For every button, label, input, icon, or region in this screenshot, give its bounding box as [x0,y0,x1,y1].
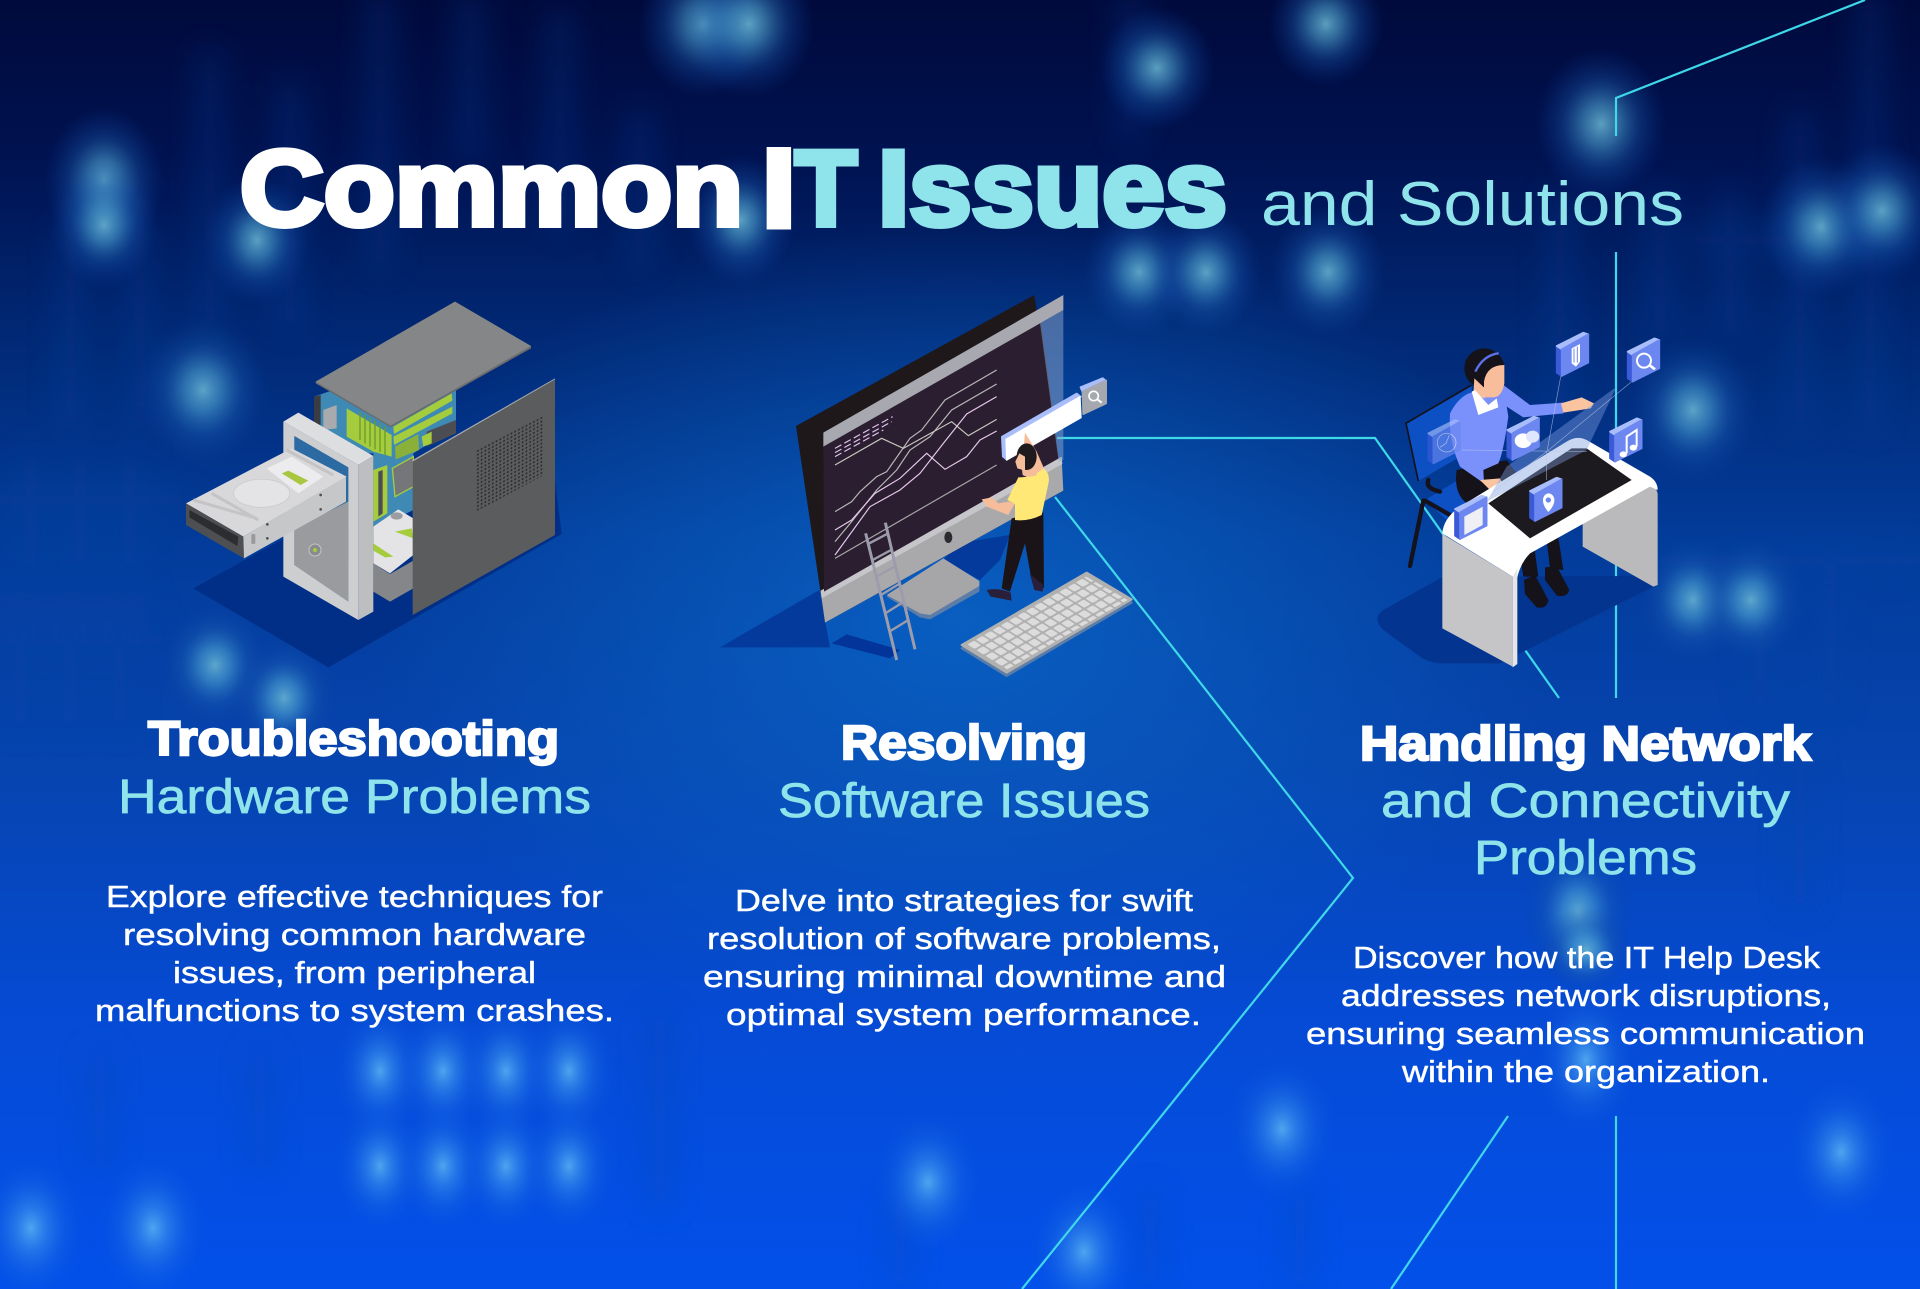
illustration: monitor with person and keyboard [720,295,1132,676]
text block: network: within the organization. [1401,1054,1770,1089]
illustration: opened computer tower [186,302,562,667]
icon: pencil [1557,333,1588,376]
text block: software: ensuring minimal downtime and [703,959,1226,994]
icon: map pin [1530,478,1562,521]
text block: software: Delve into strategies for swift [735,883,1193,918]
panel: software [703,717,1226,1032]
text block: hardware: Explore effective techniques for [106,879,603,914]
panel: network [1306,718,1865,1089]
connector lines [1022,0,1865,1289]
heading: network: and Connectivity [1381,775,1790,828]
text block: software: optimal system performance. [726,997,1201,1032]
monitor body [796,295,1063,623]
title: I [764,128,794,248]
heading: software: Resolving [841,717,1087,770]
heading: hardware [118,713,591,824]
woman [1450,348,1594,608]
heading: network [1360,718,1811,885]
desk shadow [1377,576,1653,663]
side panel [413,378,555,615]
front bezel [283,413,373,620]
text block: hardware: malfunctions to system crashes. [95,993,614,1028]
icon: notes [1455,496,1487,539]
panel: hardware [95,713,614,1028]
text block: hardware [95,879,614,1028]
top panel [316,302,531,427]
text block: network: addresses network disruptions, [1341,978,1831,1013]
holographic screen [1462,375,1632,502]
heading: software [778,717,1150,828]
text block: hardware: resolving common hardware [123,917,586,952]
title: T [795,128,857,248]
person in yellow shirt [982,433,1049,601]
heading: hardware: Hardware Problems [118,771,591,824]
title: Issues [878,128,1227,248]
heading: network: Problems [1474,832,1697,885]
heading: software: Software Issues [778,775,1150,828]
monitor shadow [720,535,1010,658]
icon: magnifier [1628,338,1659,382]
heading: network: Handling Network [1360,718,1811,771]
line chart on screen [835,370,997,558]
icon: clock [1428,420,1460,463]
icon: music note [1610,418,1642,462]
title: Common [240,128,743,248]
desk [1442,438,1658,667]
ladder [866,523,915,660]
text block: software [703,883,1226,1032]
text block: network: Discover how the IT Help Desk [1353,940,1821,975]
text block: software: resolution of software problems, [707,921,1221,956]
illustration: woman at holographic desk [1377,333,1659,667]
monitor stand [887,558,979,619]
icon: chat bubbles [1507,417,1539,460]
text block: hardware: issues, from peripheral [173,955,536,990]
keyboard [962,573,1132,676]
text block: network: ensuring seamless communication [1306,1016,1865,1051]
optical drive [186,448,347,558]
motherboard [314,390,456,533]
hard disk [373,509,413,602]
title: and Solutions [1261,170,1684,239]
tower shadow [193,480,562,667]
title [240,128,1684,248]
search bar [1002,378,1106,460]
heading: hardware: Troubleshooting [148,713,559,766]
chair [1406,385,1473,566]
text block: network [1306,940,1865,1089]
